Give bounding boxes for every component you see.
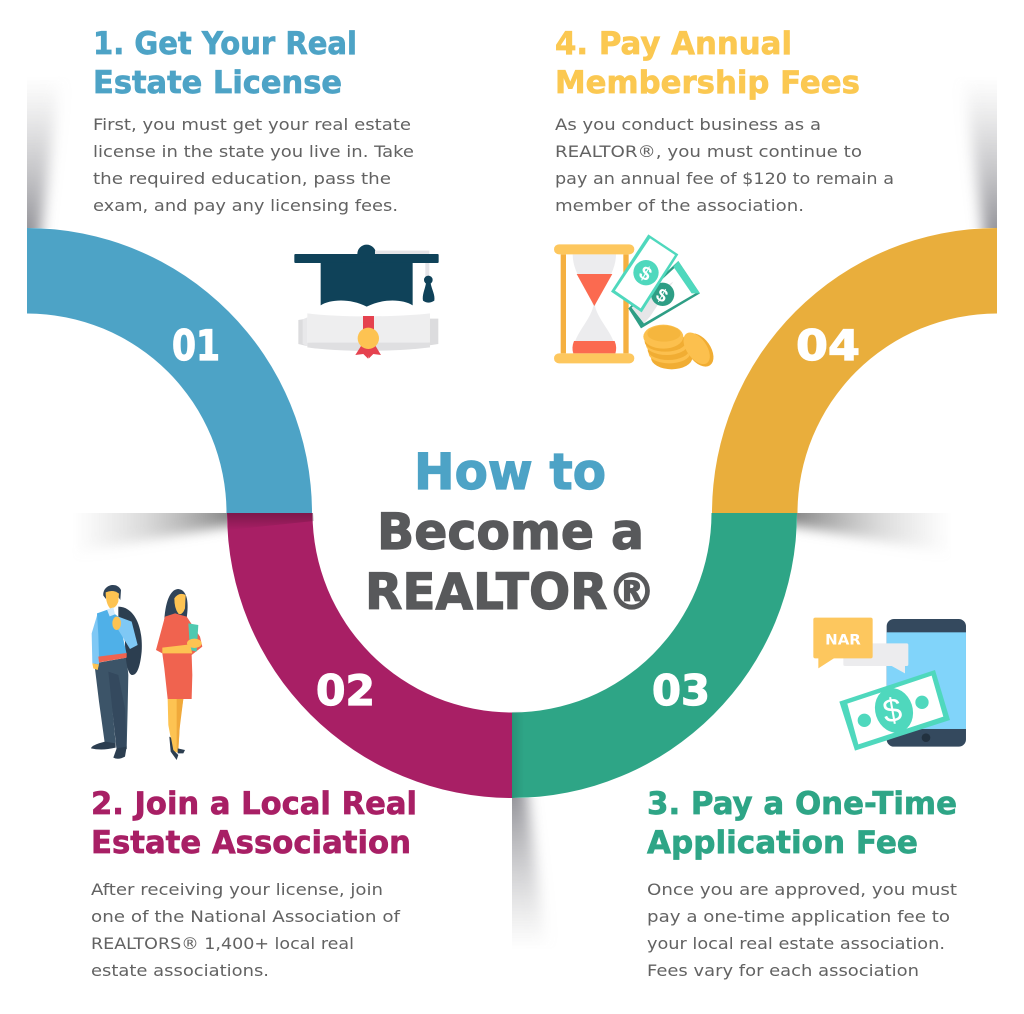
banknote <box>839 670 950 751</box>
step 3 text block <box>647 786 957 980</box>
step 1 heading: 1. Get Your Real <box>93 26 357 62</box>
shadow: top right <box>966 94 997 228</box>
icon: man and woman professionals <box>91 585 202 760</box>
ribbon segment 03 <box>512 513 797 798</box>
step 1 text block <box>93 26 414 215</box>
man <box>91 585 142 759</box>
icon: graduation cap and diploma <box>294 245 439 359</box>
step 4 heading: Membership Fees <box>555 65 860 101</box>
step 3 body: pay a one-time application fee to <box>647 907 950 926</box>
icon: phone, speech bubbles and banknote <box>813 618 966 751</box>
step 4 heading <box>555 26 860 101</box>
step 4 body: pay an annual fee of $120 to remain a <box>555 169 894 188</box>
step 2 heading: Estate Association <box>91 825 411 861</box>
step 2 heading <box>91 786 417 861</box>
banknote: $ <box>880 691 905 731</box>
step 1 body <box>93 115 414 215</box>
step 2 body: REALTORS® 1,400+ local real <box>91 934 354 953</box>
icon: hourglass, banknotes and coins: $ <box>653 284 671 307</box>
title line: Become a: Become a <box>377 503 644 561</box>
step 1 body: exam, and pay any licensing fees. <box>93 196 398 215</box>
number 01: 01 <box>172 321 220 370</box>
grey speech bubble <box>843 643 908 673</box>
step 1 body: First, you must get your real estate <box>93 115 411 134</box>
step 2 heading: 2. Join a Local Real <box>91 786 417 822</box>
ribbon segment 01 <box>27 228 312 513</box>
step 3 body: your local real estate association. <box>647 934 945 953</box>
step 1 heading: Estate License <box>93 65 342 101</box>
step 3 heading <box>647 786 957 861</box>
curved ribbon <box>27 228 997 798</box>
step 3 body: Once you are approved, you must <box>647 880 957 899</box>
NAR speech bubble <box>813 618 873 668</box>
NAR speech bubble: NAR <box>825 632 861 648</box>
step 3 heading: 3. Pay a One-Time <box>647 786 957 822</box>
ribbon segment 02 <box>227 513 512 798</box>
fold shade on segment 03 <box>512 711 524 798</box>
main title <box>365 443 656 621</box>
number 02: 02 <box>316 666 375 715</box>
shadow: left horizontal <box>92 513 227 547</box>
step 1 body: license in the state you live in. Take <box>93 142 414 161</box>
number 03: 03 <box>652 666 710 715</box>
shadow: right horizontal <box>797 513 932 547</box>
ribbon segment 04 <box>712 228 997 513</box>
step 4 body <box>555 115 894 215</box>
step 4 heading: 4. Pay Annual <box>555 26 792 62</box>
step 3 body: Fees vary for each association <box>647 961 919 980</box>
icon: hourglass, banknotes and coins <box>554 234 719 372</box>
step 4 text block <box>555 26 894 215</box>
step 3 heading: Application Fee <box>647 825 918 861</box>
step 2 body: one of the National Association of <box>91 907 401 926</box>
step 2 body <box>91 880 401 980</box>
shadow: bottom centre <box>512 798 543 933</box>
icon: hourglass, banknotes and coins: $ <box>635 262 655 286</box>
step 4 body: member of the association. <box>555 196 804 215</box>
step 2 body: After receiving your license, join <box>91 880 383 899</box>
step 4 body: REALTOR®, you must continue to <box>555 142 862 161</box>
number 04: 04 <box>796 321 860 370</box>
step 2 body: estate associations. <box>91 961 269 980</box>
step 1 heading <box>93 26 357 101</box>
shadow: top left <box>27 94 58 228</box>
woman <box>156 589 202 760</box>
title line: REALTOR: REALTOR® <box>365 563 656 621</box>
step 2 text block <box>91 786 417 980</box>
fold shade on segment 02 <box>227 513 314 530</box>
step 3 body <box>647 880 957 980</box>
title line: How to: How to <box>414 443 606 501</box>
step 4 body: As you conduct business as a <box>555 115 821 134</box>
step 1 body: the required education, pass the <box>93 169 391 188</box>
